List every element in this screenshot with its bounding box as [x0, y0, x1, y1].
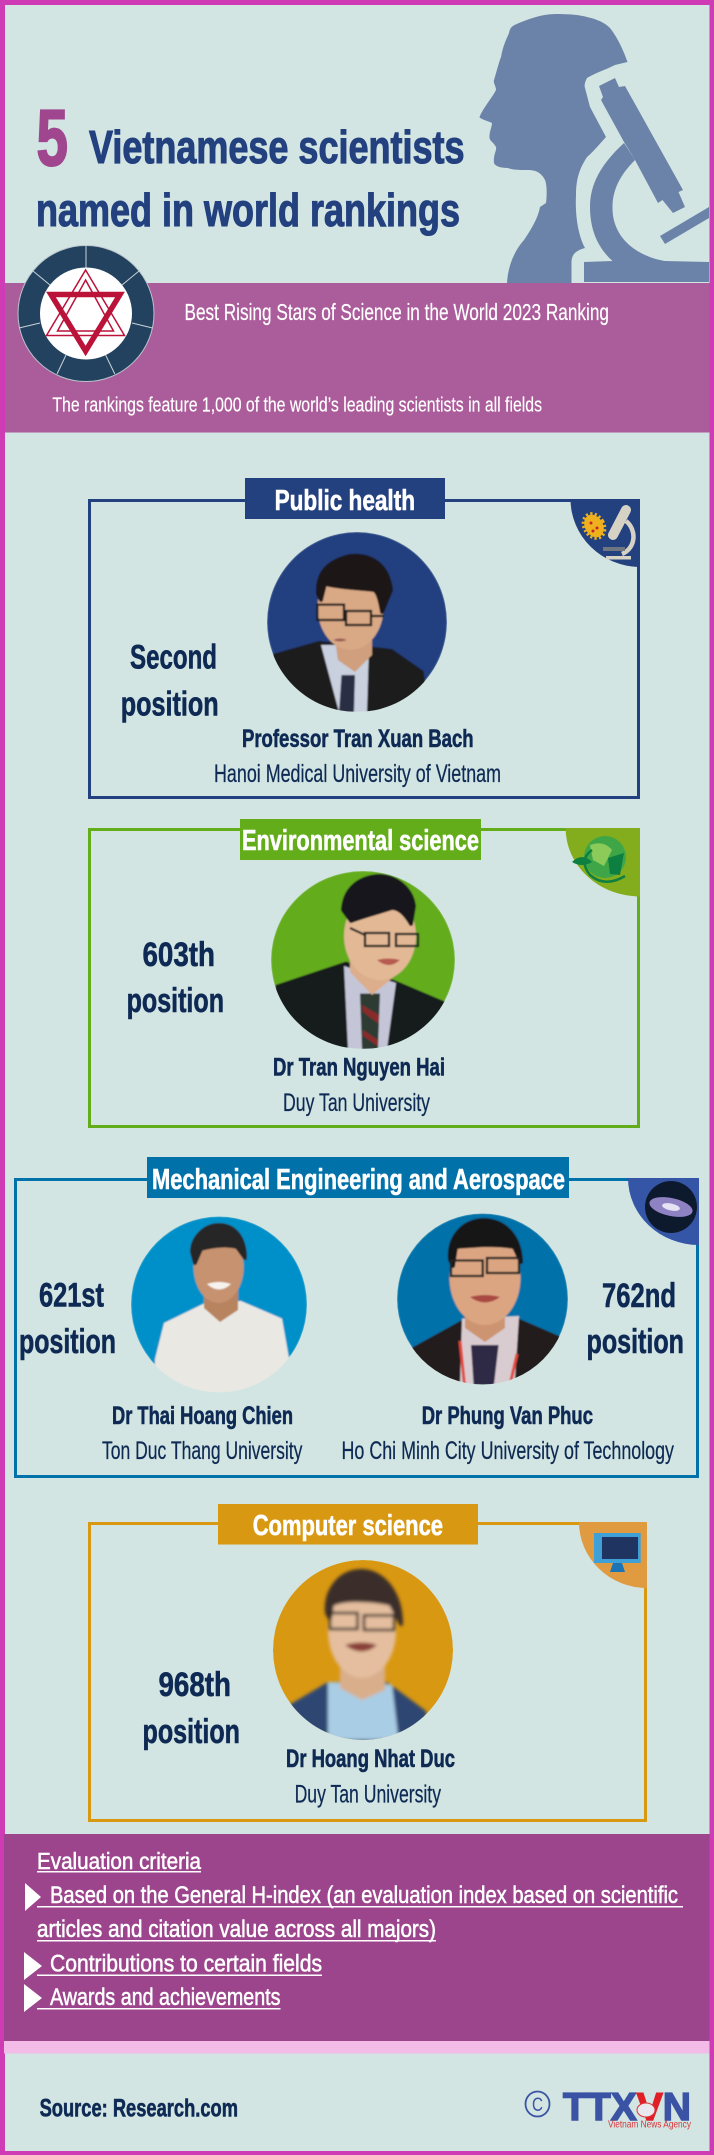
affiliation: Hanoi Medical University: Hanoi Medical University of Vietnam: [214, 760, 501, 788]
panel: mechanical engineering and aerospace: [16, 1157, 699, 1476]
criterion: H-index: articles and citation value across all majors): [37, 1916, 436, 1943]
panel: public health: [90, 478, 640, 798]
rank: 621st position: [19, 1276, 116, 1361]
name: Phung Van Phuc: Dr Phung Van Phuc: [422, 1402, 593, 1430]
label: computer science: [218, 1504, 478, 1544]
title: [36, 93, 464, 236]
icon: galaxy: [628, 1178, 699, 1245]
name: Dr Tran Nguyen Hai: Dr Tran Nguyen Hai: [273, 1054, 445, 1082]
title: 5: [36, 93, 68, 182]
rank: second position: [121, 639, 219, 724]
label: public health: Public health: [275, 485, 415, 517]
icon: star logo: [18, 245, 154, 382]
title: named in world rankings: [36, 184, 460, 236]
photo: Hoang Nhat Duc: [273, 1560, 453, 1745]
label: environmental science: [240, 819, 481, 860]
rank: 762nd position: [586, 1277, 684, 1361]
icon: earth and leaf: [566, 828, 640, 896]
criterion: H-index: [25, 1882, 683, 1943]
photo: Phung Van Phuc: [397, 1214, 570, 1385]
criterion: contributions: Contributions to certain fields: [50, 1951, 322, 1978]
panel: environmental science: [90, 819, 640, 1126]
logo: TTXVN Vietnam News Agency: Vietnam News Agency: [608, 2120, 691, 2130]
panel: evaluation criteria: [4, 1834, 710, 2054]
icon: computer monitor: [579, 1522, 647, 1588]
rank: 621st position: position: [19, 1323, 116, 1361]
rank: 603th position: [127, 936, 224, 1020]
label: public health: [245, 478, 445, 519]
banner: ranking name: [5, 283, 710, 432]
banner: ranking name: The rankings feature 1,000 of the world’s leading scientists in all fields: [52, 394, 542, 416]
rank: 603th position: 603th: [142, 936, 215, 974]
photo: Tran Nguyen Hai: [271, 871, 460, 1049]
heading: evaluation criteria: Evaluation criteria: [37, 1848, 201, 1874]
name: Hoang Nhat Duc: Dr Hoang Nhat Duc: [286, 1745, 455, 1773]
rank: 603th position: position: [127, 982, 224, 1020]
source: Source: Research.com: [40, 2095, 238, 2123]
title: Vietnamese scientists: [89, 121, 464, 173]
rank: 968th position: [142, 1666, 240, 1751]
label: computer science: Computer science: [253, 1510, 443, 1542]
photo: Tran Xuan Bach: [267, 532, 447, 712]
affiliation: Duy Tan University: Duy Tan University: [283, 1089, 430, 1117]
label: mechanical engineering and aerospace: Mechanical Engineering and Aerospace: [152, 1164, 565, 1196]
rank: 968th position: 968th: [158, 1666, 231, 1704]
logo: TTXVN Vietnam News Agency: C: [532, 2095, 543, 2116]
criterion: awards: Awards and achievements: [50, 1984, 280, 2011]
name: Professor Tran Xuan Bach: Professor Tran Xuan Bach: [242, 725, 474, 753]
label: environmental science: Environmental science: [242, 825, 479, 857]
affiliation: Duy Tan University: Duy Tan University: [295, 1780, 441, 1808]
rank: 621st position: 621st: [39, 1276, 104, 1314]
affiliation: Ton Duc Thang University: Ton Duc Thang University: [102, 1437, 303, 1465]
rank: 968th position: position: [142, 1713, 240, 1751]
rank: second position: Second: [130, 639, 217, 677]
label: mechanical engineering and aerospace: [147, 1157, 569, 1198]
photo: Thai Hoang Chien: [131, 1216, 307, 1393]
icon: virus and microscope: [570, 499, 640, 567]
illustration: scientist silhouette with microscope: [480, 14, 709, 283]
rank: 762nd position: 762nd: [602, 1277, 676, 1315]
logo: TTXVN Vietnam News Agency: TTXVN: [563, 2086, 691, 2129]
panel: computer science: [90, 1504, 647, 1820]
name: Thai Hoang Chien: Dr Thai Hoang Chien: [112, 1402, 293, 1430]
rank: second position: position: [121, 686, 219, 724]
